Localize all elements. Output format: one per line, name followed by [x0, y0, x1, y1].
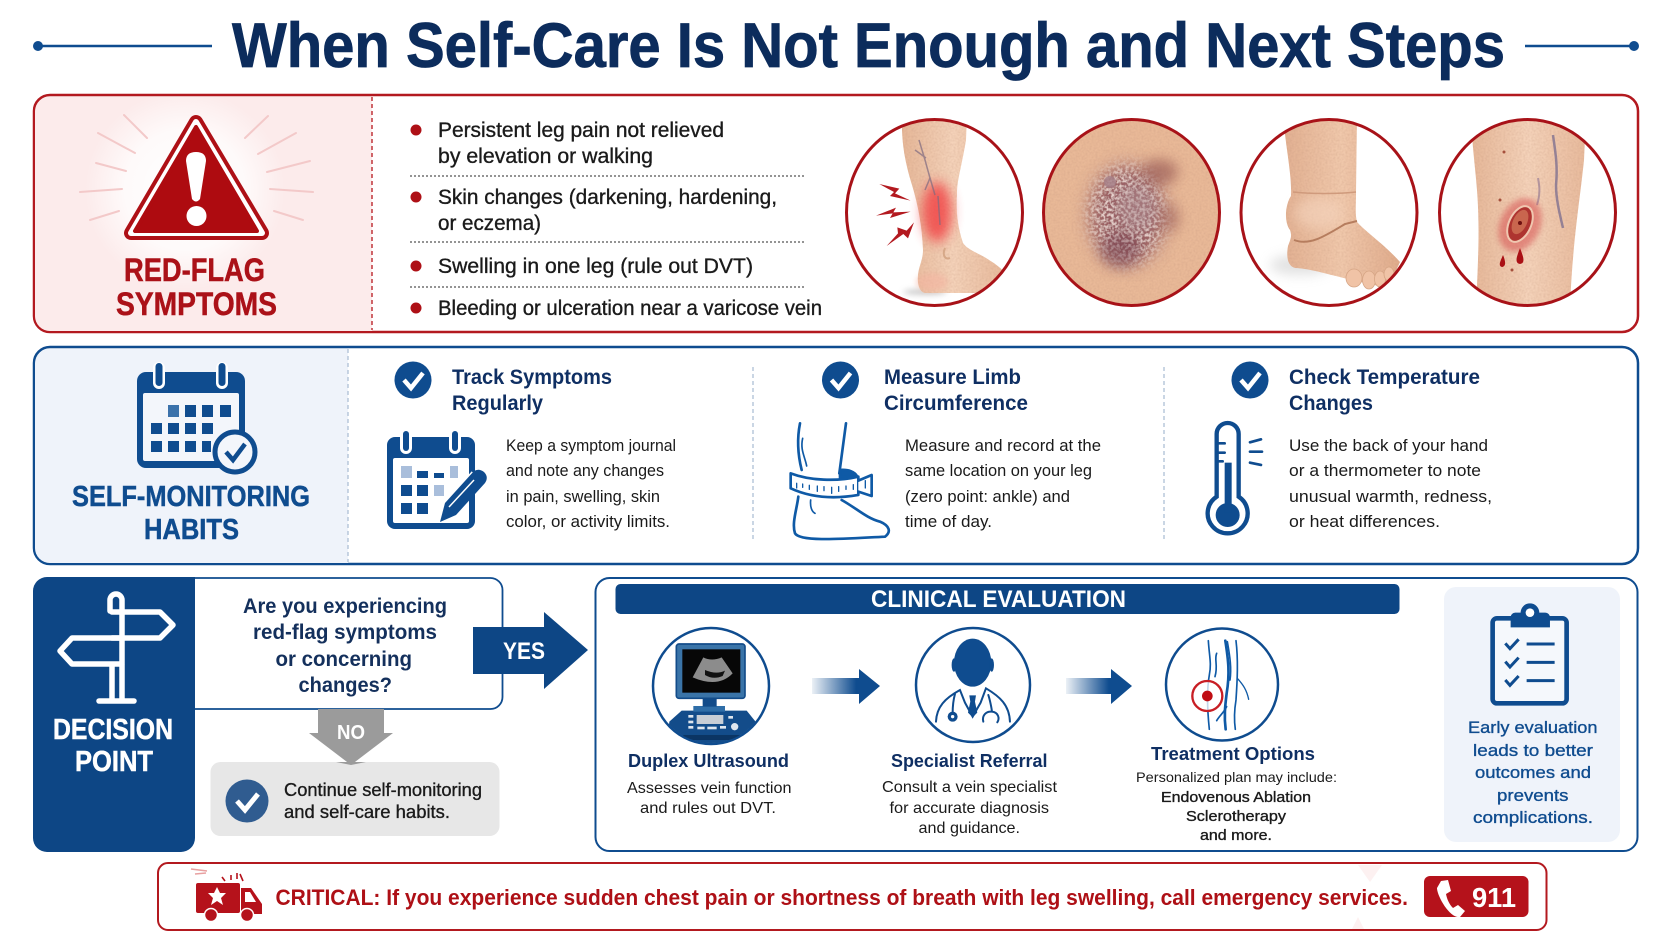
heading: red-flag symptoms [116, 252, 277, 322]
icon: thermometer [1208, 423, 1262, 533]
step: treatment options: Endovenous Ablation [1161, 790, 1311, 806]
heading: self-monitoring habits: HABITS [144, 514, 239, 546]
photo: swollen ankle [1241, 115, 1417, 306]
step: specialist referral [882, 750, 1058, 837]
text: check temperature [1289, 437, 1492, 531]
panel: self-monitoring habits [34, 347, 1638, 564]
question box: or concerning [276, 647, 412, 671]
text: measure limb: same location on your leg [905, 462, 1092, 480]
callout: early evaluation: prevents [1497, 786, 1568, 805]
symptom list: Bleeding or ulceration near a varicose vein [438, 297, 822, 320]
step: treatment options: Sclerotherapy [1186, 809, 1287, 825]
emergency banner: CRITICAL: If you experience sudden chest pain or shortness of breath with leg swelling, call emergency services. [276, 885, 1408, 910]
question box: changes? [298, 673, 392, 697]
symptom list: or eczema) [438, 212, 541, 235]
text: check temperature: unusual warmth, redness, [1289, 488, 1492, 506]
text: track symptoms: Keep a symptom journal [506, 437, 676, 455]
icon: warning triangle [80, 115, 313, 233]
text: check temperature: or heat differences. [1289, 513, 1440, 531]
photo: painful leg [846, 115, 1022, 306]
step: treatment options: and more. [1200, 828, 1272, 844]
habit: measure limb: Circumference [884, 391, 1028, 415]
emergency banner [158, 863, 1546, 930]
symptom list: Persistent leg pain not relieved [438, 119, 724, 142]
photo: leg ulcer [1440, 115, 1616, 310]
step: duplex ultrasound [627, 750, 792, 817]
habit: track symptoms [387, 362, 676, 531]
panel: red-flag symptoms [34, 95, 1638, 332]
arrow: to treatment options [1066, 669, 1132, 704]
step: duplex ultrasound: Assesses vein function [627, 780, 792, 797]
callout: early evaluation [1444, 587, 1620, 842]
heading: self-monitoring habits: SELF-MONITORING [72, 481, 310, 513]
symptom list [410, 119, 822, 320]
text: track symptoms: in pain, swelling, skin [506, 488, 660, 506]
text: check temperature: or a thermometer to note [1289, 462, 1481, 480]
text: check temperature: Use the back of your hand [1289, 437, 1488, 455]
callout: early evaluation: complications. [1473, 808, 1593, 827]
text: measure limb: (zero point: ankle) and [905, 488, 1070, 506]
question box [180, 578, 502, 709]
symptom list: Swelling in one leg (rule out DVT) [438, 255, 753, 278]
callout: early evaluation: Early evaluation [1468, 718, 1598, 737]
outcome box: continue self-monitoring [210, 762, 500, 836]
habit: measure limb [791, 362, 1101, 539]
heading: self-monitoring habits [72, 481, 310, 546]
panel: clinical evaluation [596, 578, 1638, 851]
heading: red-flag symptoms: SYMPTOMS [116, 286, 277, 322]
step: duplex ultrasound: Duplex Ultrasound [628, 750, 789, 771]
step: specialist referral: and guidance. [918, 820, 1020, 837]
side tile: decision point [33, 577, 195, 852]
arrow: to specialist referral [812, 669, 880, 704]
habit: track symptoms: Track Symptoms [452, 365, 612, 389]
side tile: decision point: DECISION [53, 714, 173, 746]
title: When Self-Care Is Not Enough and Next Steps [232, 11, 1505, 81]
symptom list: by elevation or walking [438, 145, 653, 168]
icon: doctor [916, 628, 1030, 742]
habit: check temperature [1208, 362, 1492, 533]
icon: calendar with check [137, 362, 255, 472]
question box: Are you experiencing [243, 594, 447, 618]
icon: clipboard checklist [1493, 603, 1567, 703]
photo: skin discoloration [1043, 118, 1221, 308]
habit: measure limb: Measure Limb [884, 365, 1021, 389]
step: specialist referral: Consult a vein specialist [882, 779, 1058, 796]
icon: ultrasound machine [653, 628, 769, 747]
question box: red-flag symptoms [253, 620, 437, 644]
habit: track symptoms: Regularly [452, 391, 543, 415]
step: specialist referral: Specialist Referral [891, 750, 1048, 771]
callout: early evaluation: outcomes and [1475, 763, 1591, 782]
habit: check temperature: Check Temperature [1289, 365, 1480, 389]
text: measure limb: Measure and record at the [905, 437, 1101, 455]
badge: 911 [1424, 876, 1528, 917]
icon: ambulance [191, 869, 262, 922]
callout: early evaluation: leads to better [1473, 741, 1593, 760]
symptom list: Skin changes (darkening, hardening, [438, 186, 777, 209]
icon: veins with target [1166, 628, 1278, 740]
text: track symptoms: color, or activity limits. [506, 513, 670, 531]
habit: check temperature: Changes [1289, 391, 1373, 415]
step: duplex ultrasound: and rules out DVT. [640, 800, 776, 817]
side tile: decision point: POINT [75, 746, 153, 778]
text: measure limb [905, 437, 1101, 531]
step: treatment options: Treatment Options [1151, 743, 1315, 764]
text: track symptoms [506, 437, 676, 531]
step: treatment options: Personalized plan may include: [1136, 769, 1337, 785]
icon: signpost [60, 594, 173, 701]
header bar [616, 584, 1400, 614]
heading: red-flag symptoms: RED-FLAG [124, 252, 265, 288]
icon: ankle and measuring tape [791, 423, 889, 539]
arrow: no [309, 709, 393, 765]
icon: calendar with pencil [387, 430, 487, 529]
arrow: yes: YES [503, 638, 545, 665]
arrow: no: NO [337, 721, 365, 744]
outcome box: continue self-monitoring: and self-care habits. [284, 801, 450, 822]
step: treatment options [1136, 743, 1337, 844]
arrow: yes [473, 612, 588, 689]
text: measure limb: time of day. [905, 513, 992, 531]
panel: decision point [33, 577, 588, 852]
text: track symptoms: and note any changes [506, 462, 664, 480]
badge: 911: 911 [1472, 882, 1516, 913]
outcome box: continue self-monitoring: Continue self-monitoring [284, 779, 482, 800]
header bar: CLINICAL EVALUATION [871, 586, 1126, 613]
step: specialist referral: for accurate diagnosis [890, 800, 1049, 817]
